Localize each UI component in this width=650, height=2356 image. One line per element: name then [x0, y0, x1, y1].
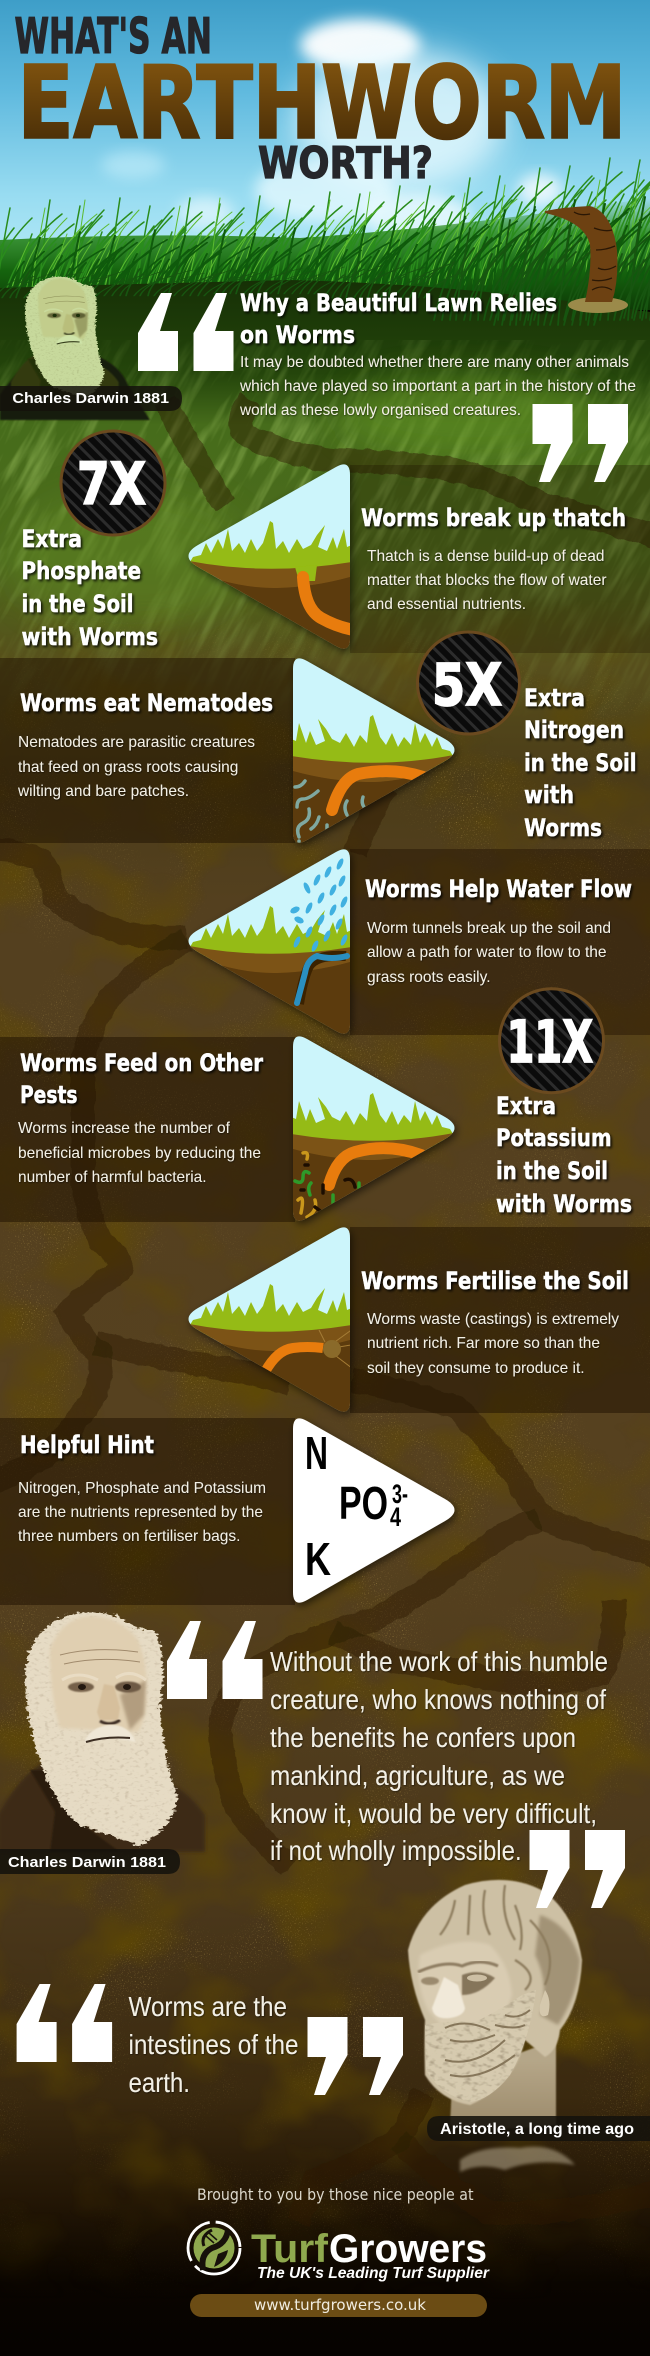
icon: water triangle	[182, 843, 357, 1043]
body text: that feed on grass roots causing	[18, 759, 238, 776]
body text: Worms waste (castings) is extremely	[367, 1311, 619, 1328]
body text: number of harmful bacteria.	[18, 1169, 206, 1186]
badge: 11X: 11X	[507, 1008, 593, 1076]
credit line: Brought to you by those nice people at	[197, 2185, 474, 2204]
panel: fertilise	[182, 1221, 629, 1421]
quote text: Worms are the	[128, 1991, 287, 2022]
website pill: www.turfgrowers.co.uk	[254, 2296, 426, 2314]
body text: are the nutrients represented by the	[18, 1504, 263, 1521]
icon: NPK triangle: PO	[339, 1477, 388, 1529]
wordmark: Growers: Growers	[329, 2227, 487, 2271]
caption: Charles Darwin	[0, 1849, 180, 1874]
heading: Helpful Hint	[20, 1431, 154, 1459]
body text: Nematodes are parasitic creatures	[18, 734, 255, 751]
icon: NPK triangle: 4	[390, 1502, 401, 1532]
panel: 7X phosphate	[22, 431, 165, 651]
coat: small Darwin	[0, 355, 150, 420]
website pill	[190, 2294, 487, 2317]
body text: Thatch is a dense build-up of dead	[367, 548, 604, 565]
icon: nematode triangle	[286, 652, 461, 852]
heading: Why a Beautiful Lawn Relies	[240, 289, 557, 317]
icon: NPK triangle: K	[305, 1533, 331, 1585]
tagline: The UK's Leading Turf Supplier	[257, 2265, 490, 2282]
body text: grass roots easily.	[367, 969, 490, 986]
label: extra nitrogen: Extra	[524, 684, 585, 712]
heading: Pests	[20, 1081, 78, 1109]
opening quote mark	[138, 293, 234, 371]
quote text: the benefits he confers upon	[270, 1722, 576, 1753]
badge: 5X	[418, 632, 520, 734]
quote text	[128, 1991, 298, 2098]
body text: Worm tunnels break up the soil and	[367, 920, 611, 937]
opening quote mark	[17, 1984, 112, 2062]
quote text: know it, would be very difficult,	[270, 1798, 597, 1829]
body text: It may be doubted whether there are many other animals	[240, 354, 629, 371]
icon: logo emblem	[188, 2222, 240, 2274]
body text: which have played so important a part in the history of the	[239, 378, 636, 395]
grass foreground	[0, 218, 650, 325]
panel: 11X potassium	[496, 989, 632, 1218]
panel: helpful hint	[18, 1418, 454, 1603]
label: extra potassium: in the Soil	[496, 1157, 608, 1185]
icon: pests triangle	[286, 1030, 461, 1230]
grass	[0, 152, 650, 310]
icon: worm emerging from the ground	[545, 206, 628, 313]
label: extra phosphate: Phosphate	[22, 557, 141, 585]
body text	[18, 1480, 266, 1545]
green grassy texture	[0, 340, 650, 696]
label: extra phosphate: with Worms	[22, 623, 158, 651]
portrait: Darwin small	[11, 276, 119, 401]
heading: on Worms	[240, 321, 355, 349]
panel: Darwin quote	[0, 1612, 608, 1874]
icon: thatch triangle	[182, 458, 357, 658]
body text: and essential nutrients.	[367, 596, 526, 613]
quote text: Without the work of this humble	[270, 1646, 608, 1677]
quote text: intestines of the	[128, 2029, 298, 2060]
opening quote mark	[167, 1621, 262, 1699]
body text	[17, 734, 255, 800]
panel: thatch	[182, 458, 626, 658]
title	[14, 8, 626, 189]
logo: TurfGrowers	[188, 2222, 490, 2282]
caption: Aristotle: Aristotle, a long time ago	[440, 2121, 634, 2138]
panel: 5X nitrogen	[418, 632, 636, 842]
caption: Charles Darwin: Charles Darwin 1881	[12, 390, 169, 407]
body text: three numbers on fertiliser bags.	[18, 1528, 240, 1545]
icon: NPK triangle	[293, 1418, 454, 1603]
green glow patches	[10, 375, 600, 630]
body text: nutrient rich. Far more so than the	[367, 1335, 600, 1352]
panel: other pests	[18, 1030, 461, 1230]
heading: Worms eat Nematodes	[20, 689, 273, 717]
body text: world as these lowly organised creatures.	[239, 402, 521, 419]
body text: wilting and bare patches.	[17, 783, 189, 800]
body text: matter that blocks the flow of water	[367, 572, 607, 589]
title: WHAT'S AN	[14, 8, 212, 65]
panel: water flow	[182, 843, 632, 1043]
body text: beneficial microbes by reducing the	[18, 1145, 261, 1162]
label: extra phosphate	[22, 525, 158, 651]
portrait: Darwin large	[0, 1612, 205, 1852]
panel: nematodes	[17, 652, 461, 852]
heading: Worms Feed on Other	[20, 1049, 263, 1077]
label: extra potassium	[496, 1092, 632, 1218]
panel: footer	[188, 2185, 490, 2317]
body text	[367, 548, 607, 613]
caption: Charles Darwin: Charles Darwin 1881	[8, 1854, 166, 1871]
badge: 7X: 7X	[77, 450, 146, 518]
heading	[240, 289, 557, 349]
sky background	[0, 0, 650, 300]
body text	[239, 354, 636, 419]
closing quote mark	[530, 1830, 625, 1908]
caption: Charles Darwin	[0, 386, 182, 411]
body text	[18, 1120, 261, 1186]
portrait: Aristotle bust	[408, 1880, 582, 2172]
badge: 5X: 5X	[432, 651, 502, 719]
body text	[367, 920, 611, 986]
panel: Darwin intro quote	[0, 276, 636, 482]
body text: Nitrogen, Phosphate and Potassium	[18, 1480, 266, 1497]
icon: NPK triangle: N	[305, 1427, 328, 1479]
closing quote mark	[532, 404, 628, 482]
body text: soil they consume to produce it.	[367, 1360, 585, 1377]
badge: 7X	[61, 431, 165, 535]
soil blotches and speckles	[0, 600, 650, 2300]
clouds	[101, 19, 562, 237]
quote text: creature, who knows nothing of	[270, 1684, 606, 1715]
quote text	[270, 1646, 608, 1866]
closing quote mark	[308, 2017, 403, 2095]
quote text: if not wholly impossible.	[270, 1835, 522, 1866]
quote text: earth.	[128, 2067, 190, 2098]
caption: Aristotle	[427, 2116, 650, 2141]
label: extra phosphate: Extra	[22, 525, 82, 553]
label: extra phosphate: in the Soil	[22, 590, 134, 618]
heading	[20, 1049, 263, 1109]
wordmark: Turf: Turf	[251, 2227, 329, 2271]
label: extra nitrogen: Worms	[524, 814, 602, 842]
label: extra nitrogen	[524, 684, 636, 842]
quote text: mankind, agriculture, as we	[270, 1760, 565, 1791]
icon: NPK triangle: 3-	[392, 1479, 408, 1509]
label: extra nitrogen: Nitrogen	[524, 716, 624, 744]
label: extra potassium: Extra	[496, 1092, 556, 1120]
body text	[367, 1311, 619, 1377]
title: worth: WORTH?	[258, 138, 433, 189]
body text: allow a path for water to flow to the	[367, 944, 607, 961]
worm tunnels	[0, 400, 650, 2222]
badge: 11X	[500, 989, 604, 1093]
panel bands	[0, 465, 650, 1605]
label: extra nitrogen: with	[524, 781, 574, 809]
body text: Worms increase the number of	[18, 1120, 231, 1137]
label: extra potassium: Potassium	[496, 1124, 612, 1152]
icon: castings triangle	[182, 1221, 357, 1421]
panel: Aristotle quote	[17, 1830, 650, 2172]
